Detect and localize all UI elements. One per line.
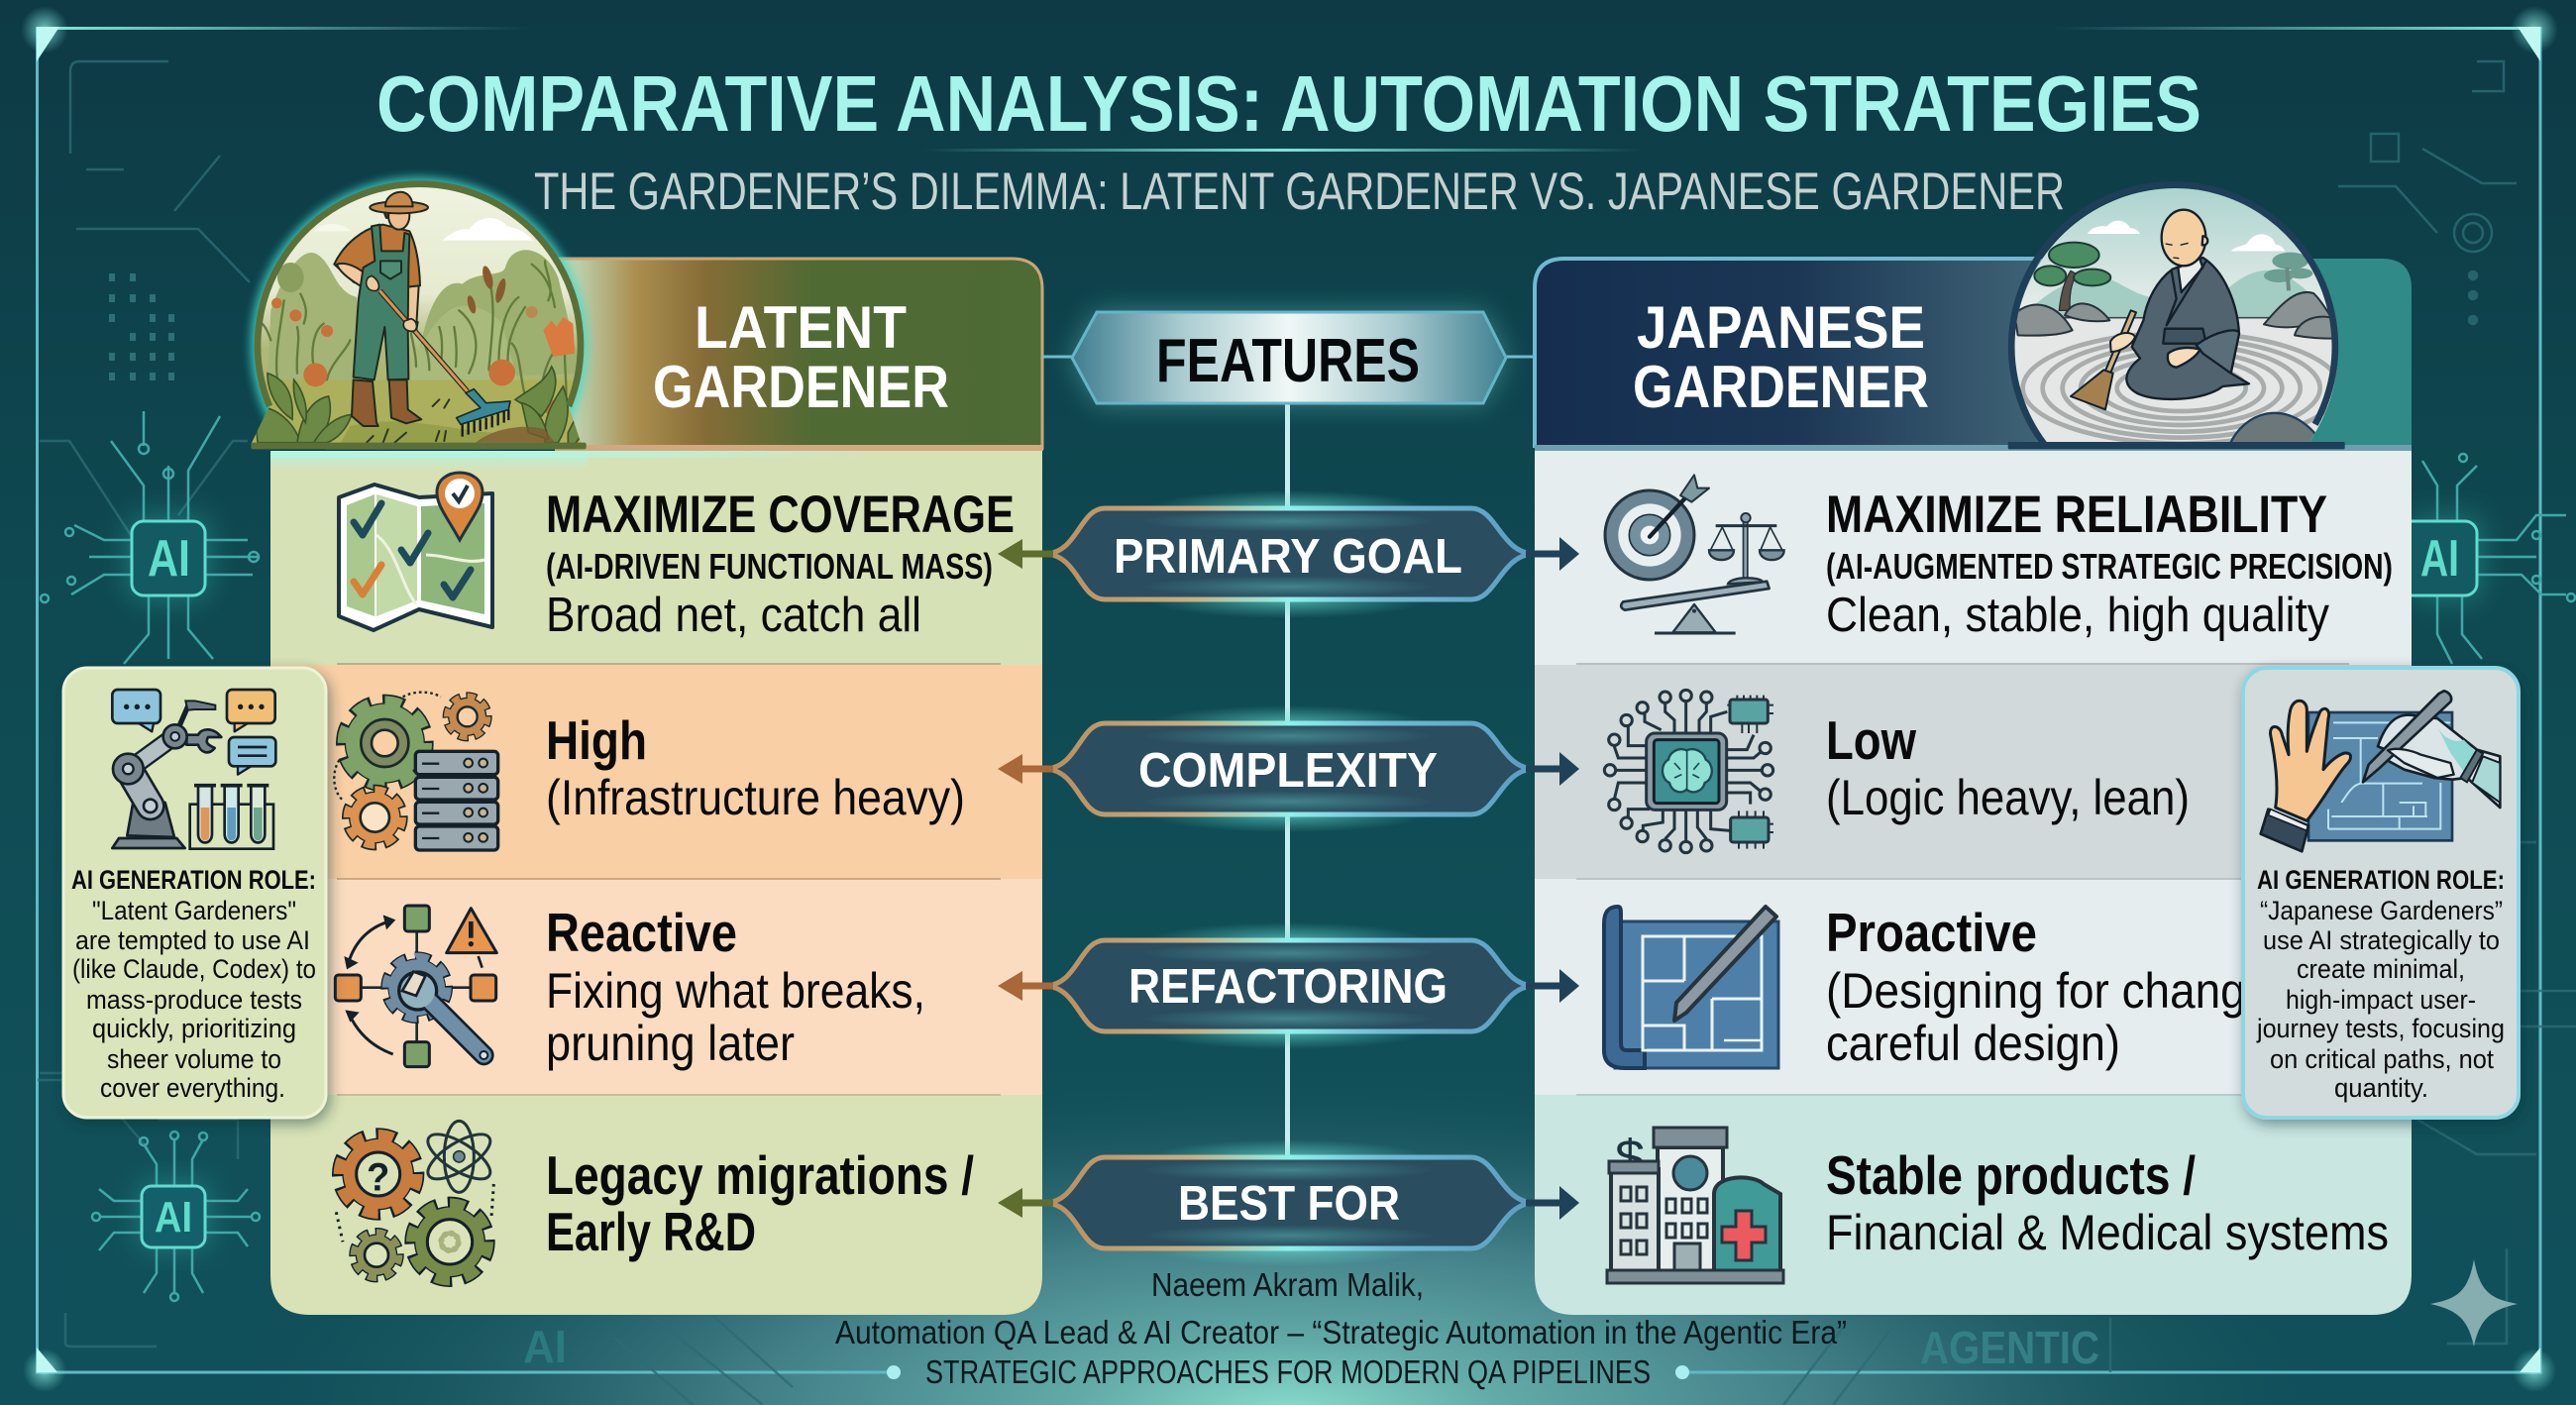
row text: high	[546, 709, 965, 825]
row text: stable products: Stable products /	[1826, 1144, 2196, 1206]
farmer figure	[334, 192, 428, 426]
row text: low: Low	[1826, 709, 1916, 771]
row text: maximize reliability: MAXIMIZE RELIABILITY	[1826, 486, 2327, 544]
row text: high: (Infrastructure heavy)	[546, 770, 965, 825]
icon: map with checkmarks and pin	[339, 473, 492, 630]
title rule	[921, 149, 1645, 152]
row text: stable products: Financial & Medical systems	[1826, 1205, 2389, 1260]
features heading	[1072, 312, 1506, 403]
panel body rows	[270, 451, 1043, 1315]
row text: maximize coverage	[546, 486, 1015, 642]
ghost label AI: AI	[523, 1321, 567, 1372]
dot grid	[109, 273, 174, 380]
callout text: sheer volume to	[107, 1044, 281, 1074]
monk figure	[2126, 210, 2249, 399]
row text: low	[1826, 709, 2190, 825]
row text: maximize coverage: MAXIMIZE COVERAGE	[546, 486, 1015, 544]
row text: stable products	[1826, 1144, 2389, 1260]
row label: primary goal: PRIMARY GOAL	[1114, 530, 1462, 584]
row label: complexity	[998, 705, 1579, 832]
callout text: use AI strategically to	[2263, 925, 2500, 955]
row text: maximize reliability: (AI-AUGMENTED STRATEGIC PRECISION)	[1826, 546, 2393, 587]
callout text: quickly, prioritizing	[92, 1014, 296, 1043]
panel: japanese gardener	[1535, 181, 2412, 1315]
row text: reactive: Reactive	[546, 902, 737, 963]
features heading: FEATURES	[1156, 327, 1420, 395]
icon: bank and hospital	[1607, 1128, 1783, 1283]
panel heading	[653, 294, 949, 420]
callout text	[2256, 865, 2505, 1103]
row text: maximize coverage: Broad net, catch all	[546, 589, 921, 642]
icon: blueprint and pen	[1604, 907, 1778, 1068]
row text: reactive	[546, 902, 925, 1071]
callout text: high-impact user-	[2286, 985, 2476, 1015]
callout text: on critical paths, not	[2270, 1044, 2494, 1074]
row label: refactoring: REFACTORING	[1128, 960, 1448, 1014]
row text: reactive: pruning later	[546, 1016, 795, 1071]
header band	[327, 259, 1042, 448]
callout text: “Japanese Gardeners”	[2260, 896, 2503, 925]
row text: legacy migrations: Legacy migrations /	[546, 1144, 974, 1206]
icon: AI chip left bottom	[92, 1132, 260, 1301]
row text: high: High	[546, 709, 647, 771]
callout text: are tempted to use AI	[75, 925, 310, 955]
broom	[2071, 310, 2136, 409]
row text: proactive: careful design)	[1826, 1016, 2120, 1071]
callout: latent AI generation role	[63, 668, 326, 1118]
icon: AI chip left top: AI	[148, 530, 190, 588]
icon: AI chip right	[2398, 454, 2575, 664]
row label: refactoring	[998, 922, 1579, 1049]
icon: human and robot hands on blueprint	[2261, 691, 2500, 851]
row text: proactive: (Designing for change,	[1826, 963, 2284, 1019]
footer credits: Naeem Akram Malik,	[1151, 1266, 1424, 1303]
footer credits	[835, 1266, 1847, 1390]
icon: wrench with nodes and warning	[335, 906, 496, 1067]
callout text: cover everything.	[100, 1073, 285, 1103]
callout text: create minimal,	[2297, 954, 2465, 984]
row label: best for: BEST FOR	[1178, 1177, 1400, 1231]
icon: target and scales	[1605, 475, 1784, 633]
icon: AI chip right: AI	[2420, 530, 2459, 588]
footer credits: Automation QA Lead & AI Creator – “Strategic Automation in the Agentic Era”	[835, 1314, 1847, 1351]
row text: maximize coverage: (AI-DRIVEN FUNCTIONAL MASS)	[546, 546, 993, 587]
subtitle: THE GARDENER’S DILEMMA: LATENT GARDENER VS. JAPANESE GARDENER	[534, 162, 2065, 221]
center connector line	[1042, 357, 1535, 1214]
panel heading: GARDENER	[1633, 354, 1929, 420]
callout text: AI GENERATION ROLE:	[2257, 865, 2505, 895]
title: COMPARATIVE ANALYSIS: AUTOMATION STRATEGIES	[376, 59, 2201, 148]
row label: best for	[998, 1139, 1579, 1266]
row label: primary goal	[998, 490, 1579, 618]
footer credits: STRATEGIC APPROACHES FOR MODERN QA PIPELINES	[925, 1353, 1651, 1390]
row text: maximize reliability: Clean, stable, high quality	[1826, 589, 2329, 642]
panel heading: LATENT	[695, 294, 907, 361]
icon: chip with brain	[1604, 690, 1773, 853]
callout text	[71, 865, 316, 1103]
row text: maximize reliability	[1826, 486, 2393, 642]
row text: legacy migrations	[546, 1144, 974, 1262]
icon: sparkle star	[2430, 1259, 2518, 1347]
row text: proactive: Proactive	[1826, 902, 2037, 963]
row text: proactive	[1826, 902, 2284, 1071]
row text: low: (Logic heavy, lean)	[1826, 770, 2190, 825]
icon: gears and server	[334, 693, 498, 850]
row text: legacy migrations: Early R&D	[546, 1201, 756, 1262]
panel body rows	[1535, 451, 2412, 1315]
panel: latent gardener	[238, 177, 1043, 1315]
callout text: (like Claude, Codex) to	[72, 954, 316, 984]
icon: gears question and atom: ?	[367, 1156, 389, 1200]
header band	[1535, 259, 2412, 448]
illustration: farmer in overgrown garden	[244, 170, 594, 450]
callout text: mass-produce tests	[86, 985, 302, 1015]
callout: japanese AI generation role	[2243, 668, 2519, 1118]
callout text: AI GENERATION ROLE:	[71, 865, 316, 895]
row label: complexity: COMPLEXITY	[1138, 744, 1438, 798]
panel heading: JAPANESE	[1637, 294, 1925, 361]
callout text: "Latent Gardeners"	[92, 896, 296, 925]
panel heading: GARDENER	[653, 354, 949, 420]
icon: robot arm with test tubes	[112, 690, 275, 849]
ghost label AGENTIC: AGENTIC	[1920, 1322, 2099, 1373]
callout text: quantity.	[2334, 1073, 2428, 1103]
panel heading	[1633, 294, 1929, 420]
icon: AI chip left bottom: AI	[155, 1193, 192, 1242]
icon: gears question and atom	[336, 1121, 496, 1277]
illustration: monk raking zen garden	[2004, 181, 2348, 449]
icon: bank and hospital: $	[1615, 1130, 1645, 1185]
icon: AI chip left top	[41, 411, 260, 664]
callout text: journey tests, focusing	[2256, 1014, 2505, 1043]
row text: reactive: Fixing what breaks,	[546, 963, 925, 1019]
